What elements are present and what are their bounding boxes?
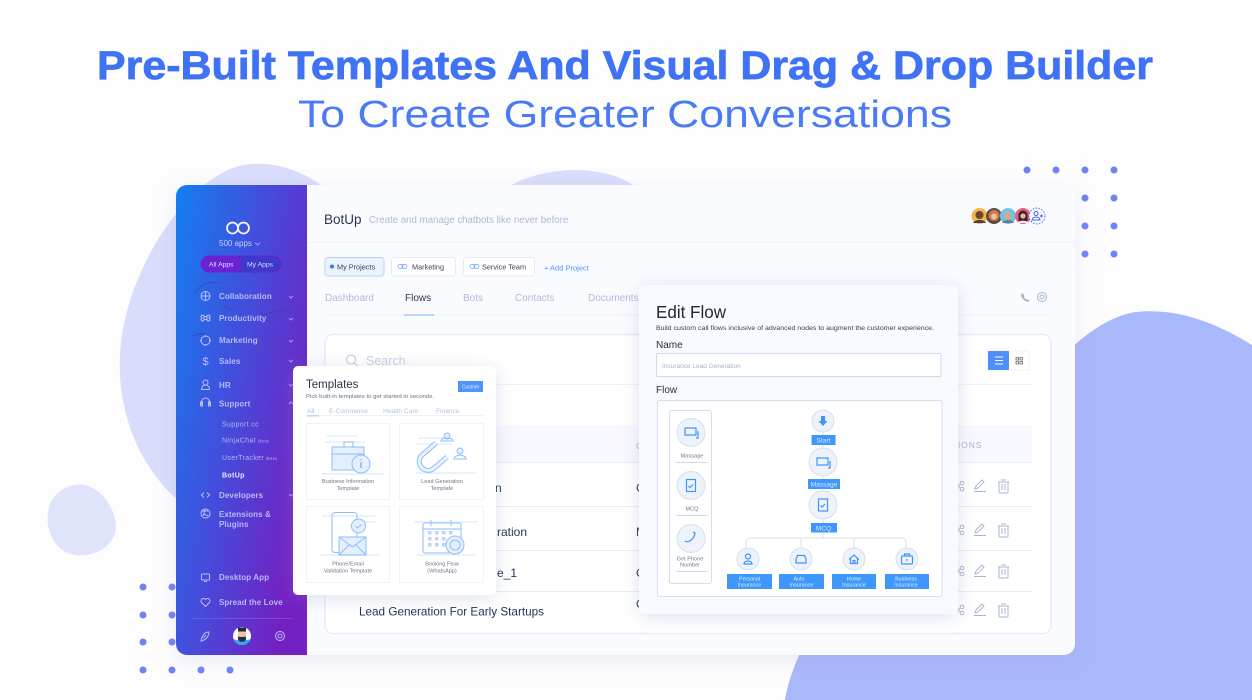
panel: templates — [293, 366, 496, 595]
node: personal insurance: Personal — [739, 576, 760, 582]
title: Pre-Built Templates And Visual Drag & Drop Builder — [97, 44, 1153, 88]
node: home insurance: Home — [847, 576, 861, 582]
nav: marketing: Marketing — [219, 336, 258, 345]
template tabs: Finance — [436, 408, 460, 415]
node: home insurance — [832, 548, 876, 589]
pill: my projects: My Projects — [337, 262, 375, 272]
rows: C — [636, 481, 645, 495]
template tabs: Health Care — [383, 408, 419, 415]
rows: M — [636, 525, 646, 539]
rows: n — [495, 481, 502, 495]
template tabs: All — [307, 408, 315, 415]
table header: IONS — [958, 440, 982, 450]
rows: Lead Generation For Early Startups — [359, 604, 544, 618]
view toggle — [988, 351, 1029, 370]
nav: support: Support — [219, 400, 251, 408]
rows: ration — [497, 525, 527, 539]
dots: bottom left — [140, 584, 234, 674]
nav: sales: $ — [202, 356, 209, 368]
card: booking flow: (WhatsApp) — [427, 568, 457, 574]
tabs: Dashboard — [325, 293, 374, 304]
pill: my projects — [325, 258, 384, 276]
flow label: Flow — [656, 385, 678, 396]
rows — [359, 481, 646, 618]
blob: right large — [785, 311, 1252, 700]
row actions — [958, 480, 1009, 617]
nav: extensions: Extensions & — [219, 510, 271, 519]
apps count: 500 apps — [219, 239, 252, 248]
palette: message: Massage — [681, 454, 703, 460]
card: lead generation — [400, 424, 484, 500]
sidebar streaks — [193, 265, 292, 337]
blob: small left — [47, 484, 116, 555]
palette: get phone number — [676, 524, 708, 572]
connectors — [746, 432, 906, 559]
node: auto insurance: Insurance — [790, 582, 813, 588]
nav: desktop app: Desktop App — [219, 573, 269, 582]
nav: hr: HR — [219, 381, 231, 390]
card: phone email validation: Validation Template — [324, 568, 372, 574]
icon: magnet — [416, 433, 476, 473]
name field — [656, 340, 941, 376]
nav: collaboration: Collaboration — [219, 292, 272, 301]
nav: spread the love: Spread the Love — [219, 598, 283, 607]
nav: support sub items: Support.cc — [222, 422, 259, 428]
nav: support sub items: NinjaChat Beta — [222, 438, 269, 444]
node: mcq: MCQ — [816, 526, 831, 532]
node: message: Massage — [811, 482, 838, 488]
nav: productivity: Productivity — [219, 314, 267, 323]
nav: marketing — [200, 335, 293, 346]
bottom icons — [191, 618, 292, 645]
card: lead generation: Lead Generation — [421, 479, 463, 485]
card: business information: Business Information — [322, 479, 374, 485]
tabs: Bots — [463, 293, 483, 304]
app window — [176, 185, 1075, 655]
node: start — [812, 410, 836, 445]
nav: extensions — [201, 509, 271, 529]
icon: briefcase — [322, 436, 384, 474]
node: auto insurance: Auto — [793, 576, 805, 582]
nav: sales — [202, 356, 293, 368]
icon: phone and envelope — [320, 512, 380, 555]
node: business insurance: Insurance — [894, 582, 918, 588]
title — [97, 44, 1153, 136]
table panel — [325, 334, 1051, 634]
table header: C — [636, 441, 643, 451]
card: phone email validation: Phone/Email — [332, 562, 364, 568]
header — [307, 212, 1075, 242]
logo — [227, 222, 249, 234]
node: business insurance: Business — [895, 576, 917, 582]
palette: mcq: MCQ — [685, 506, 699, 512]
pill: service team — [464, 258, 534, 276]
project pills — [325, 258, 590, 276]
pill: marketing — [392, 258, 456, 276]
nav: productivity — [201, 314, 293, 323]
node: personal insurance: Insurance — [738, 582, 761, 588]
palette: get phone number: Get Phone — [677, 556, 703, 562]
node: auto insurance — [779, 548, 824, 589]
nav: support sub items — [222, 422, 277, 480]
sidebar — [176, 185, 307, 655]
name field: Insurance Lead Generation — [662, 363, 741, 370]
node: personal insurance — [727, 548, 772, 589]
custom button: Custom — [462, 384, 479, 390]
rows: C — [636, 566, 645, 580]
search: Search — [366, 354, 406, 368]
subtitle: To Create Greater Conversations — [298, 94, 952, 136]
node palette — [670, 410, 712, 584]
palette: get phone number: Number — [680, 562, 700, 568]
tabs: Documents — [588, 293, 639, 304]
card: booking flow — [400, 506, 484, 582]
card: booking flow: Booking Flow — [425, 562, 460, 568]
node: start: Start — [817, 438, 831, 444]
tabs: Flows — [405, 293, 431, 304]
tabs — [325, 292, 1051, 316]
card: business information: Template — [337, 486, 359, 492]
card: phone email validation — [306, 506, 390, 582]
dots: top right — [1024, 166, 1118, 258]
rows: C — [636, 597, 645, 611]
nav: collaboration — [201, 292, 293, 301]
blob: left lavender — [120, 164, 380, 524]
templates heading: Templates — [306, 379, 359, 391]
template tabs — [307, 408, 483, 416]
table header — [326, 425, 1032, 462]
node: home insurance: Insurance — [842, 582, 866, 588]
edit flow heading: Edit Flow — [656, 302, 726, 322]
header: Create and manage chatbots like never before — [369, 215, 568, 226]
panel: edit flow — [639, 285, 958, 614]
nav: support sub items: UserTracker Beta — [222, 455, 277, 462]
header: BotUp — [324, 212, 362, 227]
team avatars — [972, 208, 1045, 224]
nav: hr — [202, 380, 293, 390]
nav: sales: Sales — [219, 357, 241, 366]
flow diagram — [658, 400, 942, 596]
node: mcq — [809, 491, 837, 532]
node: message — [808, 448, 840, 489]
card: lead generation: Template — [431, 486, 453, 492]
tabs: Contacts — [515, 293, 554, 304]
phone icon — [1021, 294, 1030, 302]
nav: developers — [202, 491, 293, 500]
search — [346, 354, 406, 368]
app switcher: All Apps — [209, 262, 234, 268]
add project: + Add Project — [544, 264, 590, 272]
blob: top centre — [510, 170, 635, 186]
node: business insurance — [885, 548, 929, 589]
app switcher — [201, 256, 281, 272]
nav: developers: Developers — [219, 491, 264, 500]
settings icon — [1038, 292, 1046, 302]
pill: service team: Service Team — [482, 262, 526, 272]
name field: Name — [656, 340, 683, 351]
nav: extensions: Plugins — [219, 520, 249, 529]
templates description: Pick built-in templates to get started in seconds. — [306, 394, 434, 400]
card: business information — [306, 424, 390, 500]
app switcher: My Apps — [247, 262, 274, 268]
nav: support — [200, 398, 293, 408]
custom button — [458, 381, 483, 392]
edit flow description: Build custom call flows inclusive of advanced nodes to augment the customer experience. — [656, 325, 934, 332]
palette: message — [676, 418, 708, 462]
pill: marketing: Marketing — [412, 262, 444, 272]
icon: calendar — [414, 520, 478, 555]
palette: mcq — [676, 472, 708, 516]
template tabs: E-Commerce — [329, 408, 368, 415]
rows: e_1 — [497, 566, 517, 580]
nav: support sub items: BotUp — [222, 472, 245, 480]
